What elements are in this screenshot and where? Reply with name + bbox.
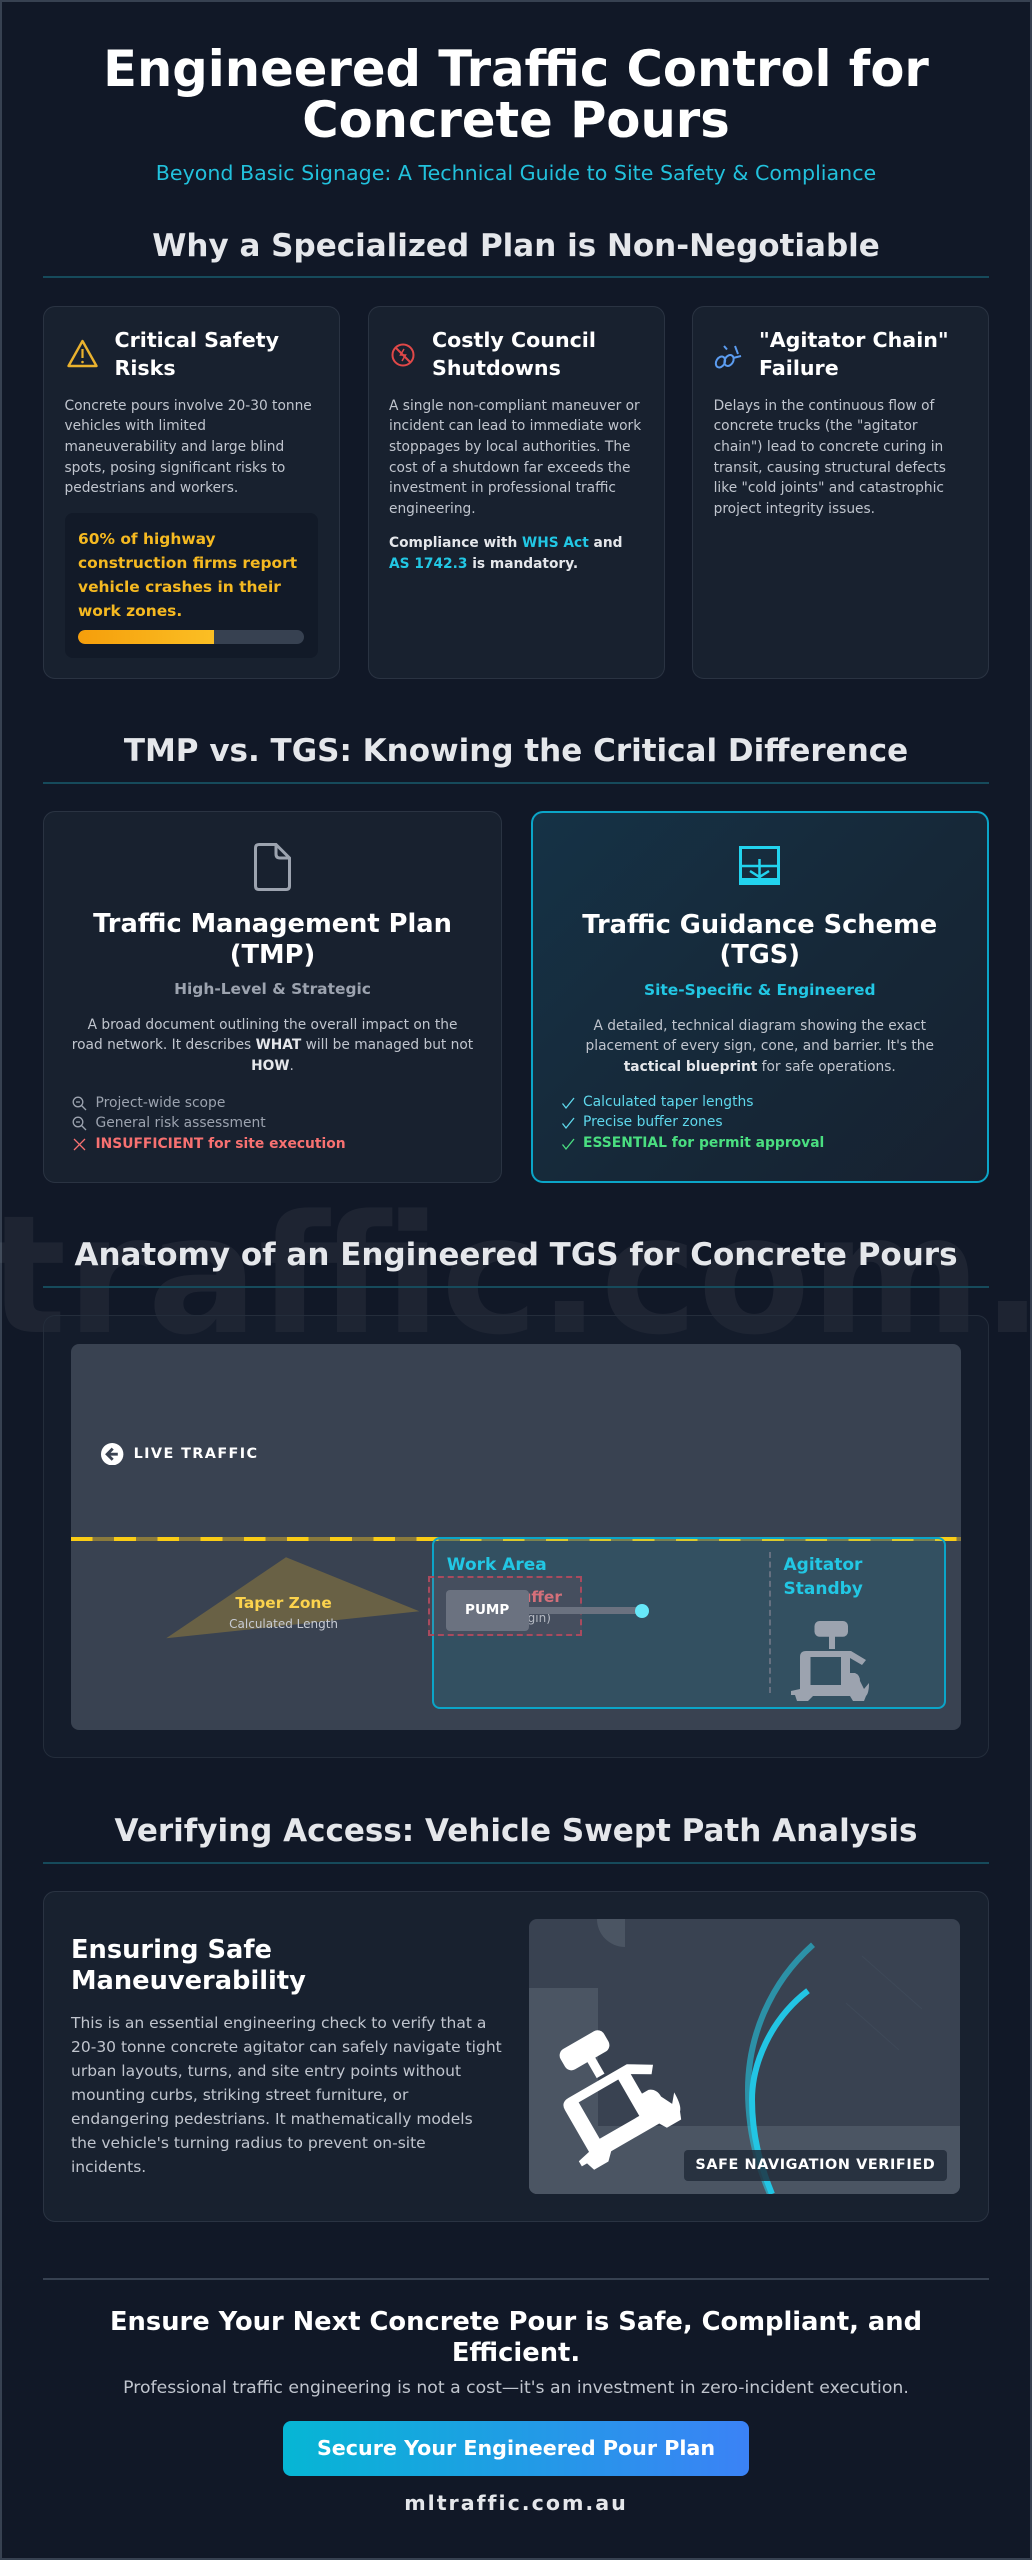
- tmp heading: (TMP): [230, 940, 315, 970]
- card heading: Costly Council: [432, 328, 596, 352]
- button: Secure Your Engineered Pour Plan: [317, 2436, 715, 2460]
- call to action heading: Efficient.: [452, 2338, 580, 2368]
- heading: swept path: Verifying Access: Vehicle Swept Path Analysis: [115, 1812, 917, 1848]
- standby label: Standby: [784, 1579, 863, 1599]
- swept text: the vehicle's turning radius to prevent on-site: [71, 2134, 426, 2152]
- list item: insufficient: INSUFFICIENT for site execution: [96, 1136, 346, 1152]
- work area: [432, 1537, 946, 1709]
- lane dashes: [71, 1537, 960, 1541]
- card text: Delays in the continuous flow of: [714, 398, 934, 414]
- tmp description: A broad document outlining the overall impact on the: [88, 1017, 457, 1033]
- stat text: vehicle crashes in their: [78, 578, 281, 596]
- swept path diagram: [529, 1919, 960, 2194]
- card heading: "Agitator Chain": [759, 328, 949, 352]
- standby divider: [768, 1552, 770, 1693]
- tmp list: [72, 1094, 346, 1152]
- pump boom: [528, 1607, 638, 1614]
- live traffic text: LIVE TRAFFIC: [134, 1446, 258, 1462]
- list item: risk: General risk assessment: [96, 1115, 266, 1131]
- title: Concrete Pours: [302, 91, 730, 149]
- swept text: This is an essential engineering check to verify that a: [71, 2014, 486, 2032]
- tgs list: [562, 1094, 824, 1151]
- swept text: urban layouts, turns, and site entry points without: [71, 2062, 461, 2080]
- list item: scope: Project-wide scope: [96, 1094, 225, 1110]
- card text: A single non-compliant maneuver or: [389, 398, 640, 414]
- swept text: 20-30 tonne concrete agitator can safely navigate tight: [71, 2038, 502, 2056]
- list item: taper: Calculated taper lengths: [583, 1094, 754, 1110]
- card text: [714, 398, 946, 517]
- card heading: Shutdowns: [432, 356, 561, 380]
- work area label: Work Area: [447, 1555, 547, 1575]
- card heading: Critical Safety: [114, 328, 279, 352]
- swept text: mounting curbs, striking street furniture, or: [71, 2086, 408, 2104]
- tgs description: A detailed, technical diagram showing the exact: [593, 1018, 926, 1034]
- card text: stoppages by local authorities. The: [389, 439, 630, 455]
- compliance note: AS 1742.3 is mandatory.: [389, 556, 578, 572]
- taper sublabel: Calculated Length: [229, 1617, 338, 1631]
- stat text: construction firms report: [78, 554, 297, 572]
- heading: why a specialized plan: Why a Specialized Plan is Non-Negotiable: [152, 228, 880, 264]
- website: mltraffic.com.au: [404, 2491, 628, 2515]
- taper zone: [166, 1557, 419, 1638]
- tmp heading: Traffic Management Plan: [93, 909, 452, 939]
- heading: tmp vs tgs: TMP vs. TGS: Knowing the Critical Difference: [124, 732, 908, 768]
- tgs description: tactical blueprint for safe operations.: [624, 1059, 896, 1075]
- swept text: incidents.: [71, 2158, 146, 2176]
- tgs heading: Traffic Guidance Scheme: [582, 910, 937, 940]
- card text: incident can lead to immediate work: [389, 418, 641, 434]
- icon: blueprint: [739, 846, 780, 885]
- tmp description: HOW.: [251, 1058, 294, 1074]
- road: [71, 1344, 960, 1730]
- swept heading: Ensuring Safe: [71, 1934, 272, 1964]
- panel: traffic management plan: [43, 811, 502, 1183]
- card text: concrete trucks (the "agitator: [714, 418, 918, 434]
- swept heading: Maneuverability: [71, 1966, 306, 1996]
- tgs description: placement of every sign, cone, and barrier. It's the: [586, 1038, 934, 1054]
- call to action text: Professional traffic engineering is not a cost—it's an investment in zero-incident execution.: [123, 2378, 909, 2398]
- tmp heading: [93, 909, 452, 970]
- card heading: [432, 328, 596, 380]
- subtitle: Beyond Basic Signage: A Technical Guide to Site Safety & Compliance: [156, 161, 876, 185]
- panel: costly council shutdowns: [368, 306, 665, 679]
- card text: vehicles with limited: [64, 418, 206, 434]
- call to action heading: Ensure Your Next Concrete Pour is Safe, Compliant, and: [110, 2307, 922, 2337]
- kerb block bottom: [529, 2126, 960, 2194]
- tmp description: road network. It describes WHAT will be managed but not: [72, 1037, 473, 1053]
- safety buffer: [428, 1576, 582, 1636]
- card text: transit, causing structural defects: [714, 460, 946, 476]
- card heading: Risks: [114, 356, 176, 380]
- list item: buffer: Precise buffer zones: [583, 1114, 723, 1130]
- swept heading: [71, 1934, 306, 1996]
- card heading: [759, 328, 949, 380]
- stat text: 60% of highway: [78, 530, 216, 548]
- kerb block left: [529, 1988, 598, 2194]
- icon: warning triangle: [67, 340, 98, 368]
- icon: broken chain: [714, 345, 742, 368]
- progress bar: [78, 630, 304, 644]
- tmp description: [72, 1017, 473, 1074]
- buffer label: Safety Buffer: [447, 1588, 562, 1606]
- taper label: Taper Zone: [235, 1594, 332, 1612]
- swept path curves and truck: [560, 1942, 815, 2194]
- card text: investment in professional traffic: [389, 480, 616, 496]
- button: [283, 2421, 749, 2476]
- call to action heading: [110, 2307, 922, 2368]
- card text: cost of a shutdown far exceeds the: [389, 460, 630, 476]
- compliance note: [389, 535, 622, 572]
- panel: agitator chain failure: [692, 306, 989, 679]
- standby label: Agitator: [784, 1555, 862, 1575]
- stat text: [78, 530, 297, 620]
- card heading: [114, 328, 279, 380]
- panel: traffic guidance scheme: [530, 811, 989, 1183]
- card text: like "cold joints" and catastrophic: [714, 480, 944, 496]
- icon: document: [254, 843, 291, 891]
- card text: chain") lead to concrete curing in: [714, 439, 943, 455]
- standby label: [784, 1555, 863, 1599]
- verified badge: [684, 2150, 947, 2181]
- stat text: work zones.: [78, 602, 182, 620]
- building corner: [597, 1919, 625, 1947]
- swept text: endangering pedestrians. It mathematically models: [71, 2110, 473, 2128]
- card text: [64, 398, 312, 496]
- panel: anatomy diagram: [43, 1315, 989, 1758]
- tgs subtitle: Site-Specific & Engineered: [644, 981, 876, 999]
- tgs description: [586, 1018, 934, 1075]
- pump boom tip: [635, 1604, 649, 1618]
- title: [103, 40, 929, 149]
- tgs heading: [582, 910, 937, 970]
- card text: project integrity issues.: [714, 501, 875, 517]
- title: Engineered Traffic Control for: [103, 40, 929, 98]
- buffer sublabel: (Safety Margin): [458, 1611, 551, 1625]
- panel: critical safety risks: [43, 306, 340, 679]
- card heading: Failure: [759, 356, 839, 380]
- tmp subtitle: High-Level & Strategic: [174, 980, 371, 998]
- heading: anatomy: Anatomy of an Engineered TGS for Concrete Pours: [74, 1236, 958, 1272]
- tgs heading: (TGS): [719, 940, 800, 970]
- stat box: 60 percent: [64, 513, 318, 658]
- pump: PUMP: [465, 1602, 509, 1618]
- swept text: [70, 2014, 502, 2176]
- list item: essential: ESSENTIAL for permit approval: [583, 1135, 824, 1151]
- card text: Concrete pours involve 20-30 tonne: [64, 398, 312, 414]
- card text: pedestrians and workers.: [64, 480, 238, 496]
- live traffic label: [101, 1443, 258, 1465]
- card text: engineering.: [389, 501, 476, 517]
- icon: left arrow circle: [101, 1443, 124, 1465]
- card text: [389, 398, 642, 517]
- panel: swept path analysis: [43, 1891, 989, 2222]
- pump: [446, 1590, 529, 1631]
- card text: maneuverability and large blind: [64, 439, 284, 455]
- icon: prohibited: [392, 344, 414, 366]
- compliance note: Compliance with WHS Act and: [389, 535, 622, 551]
- card text: spots, posing significant risks to: [64, 460, 285, 476]
- icon: agitator truck: [791, 1621, 869, 1701]
- verified badge: SAFE NAVIGATION VERIFIED: [695, 2157, 935, 2173]
